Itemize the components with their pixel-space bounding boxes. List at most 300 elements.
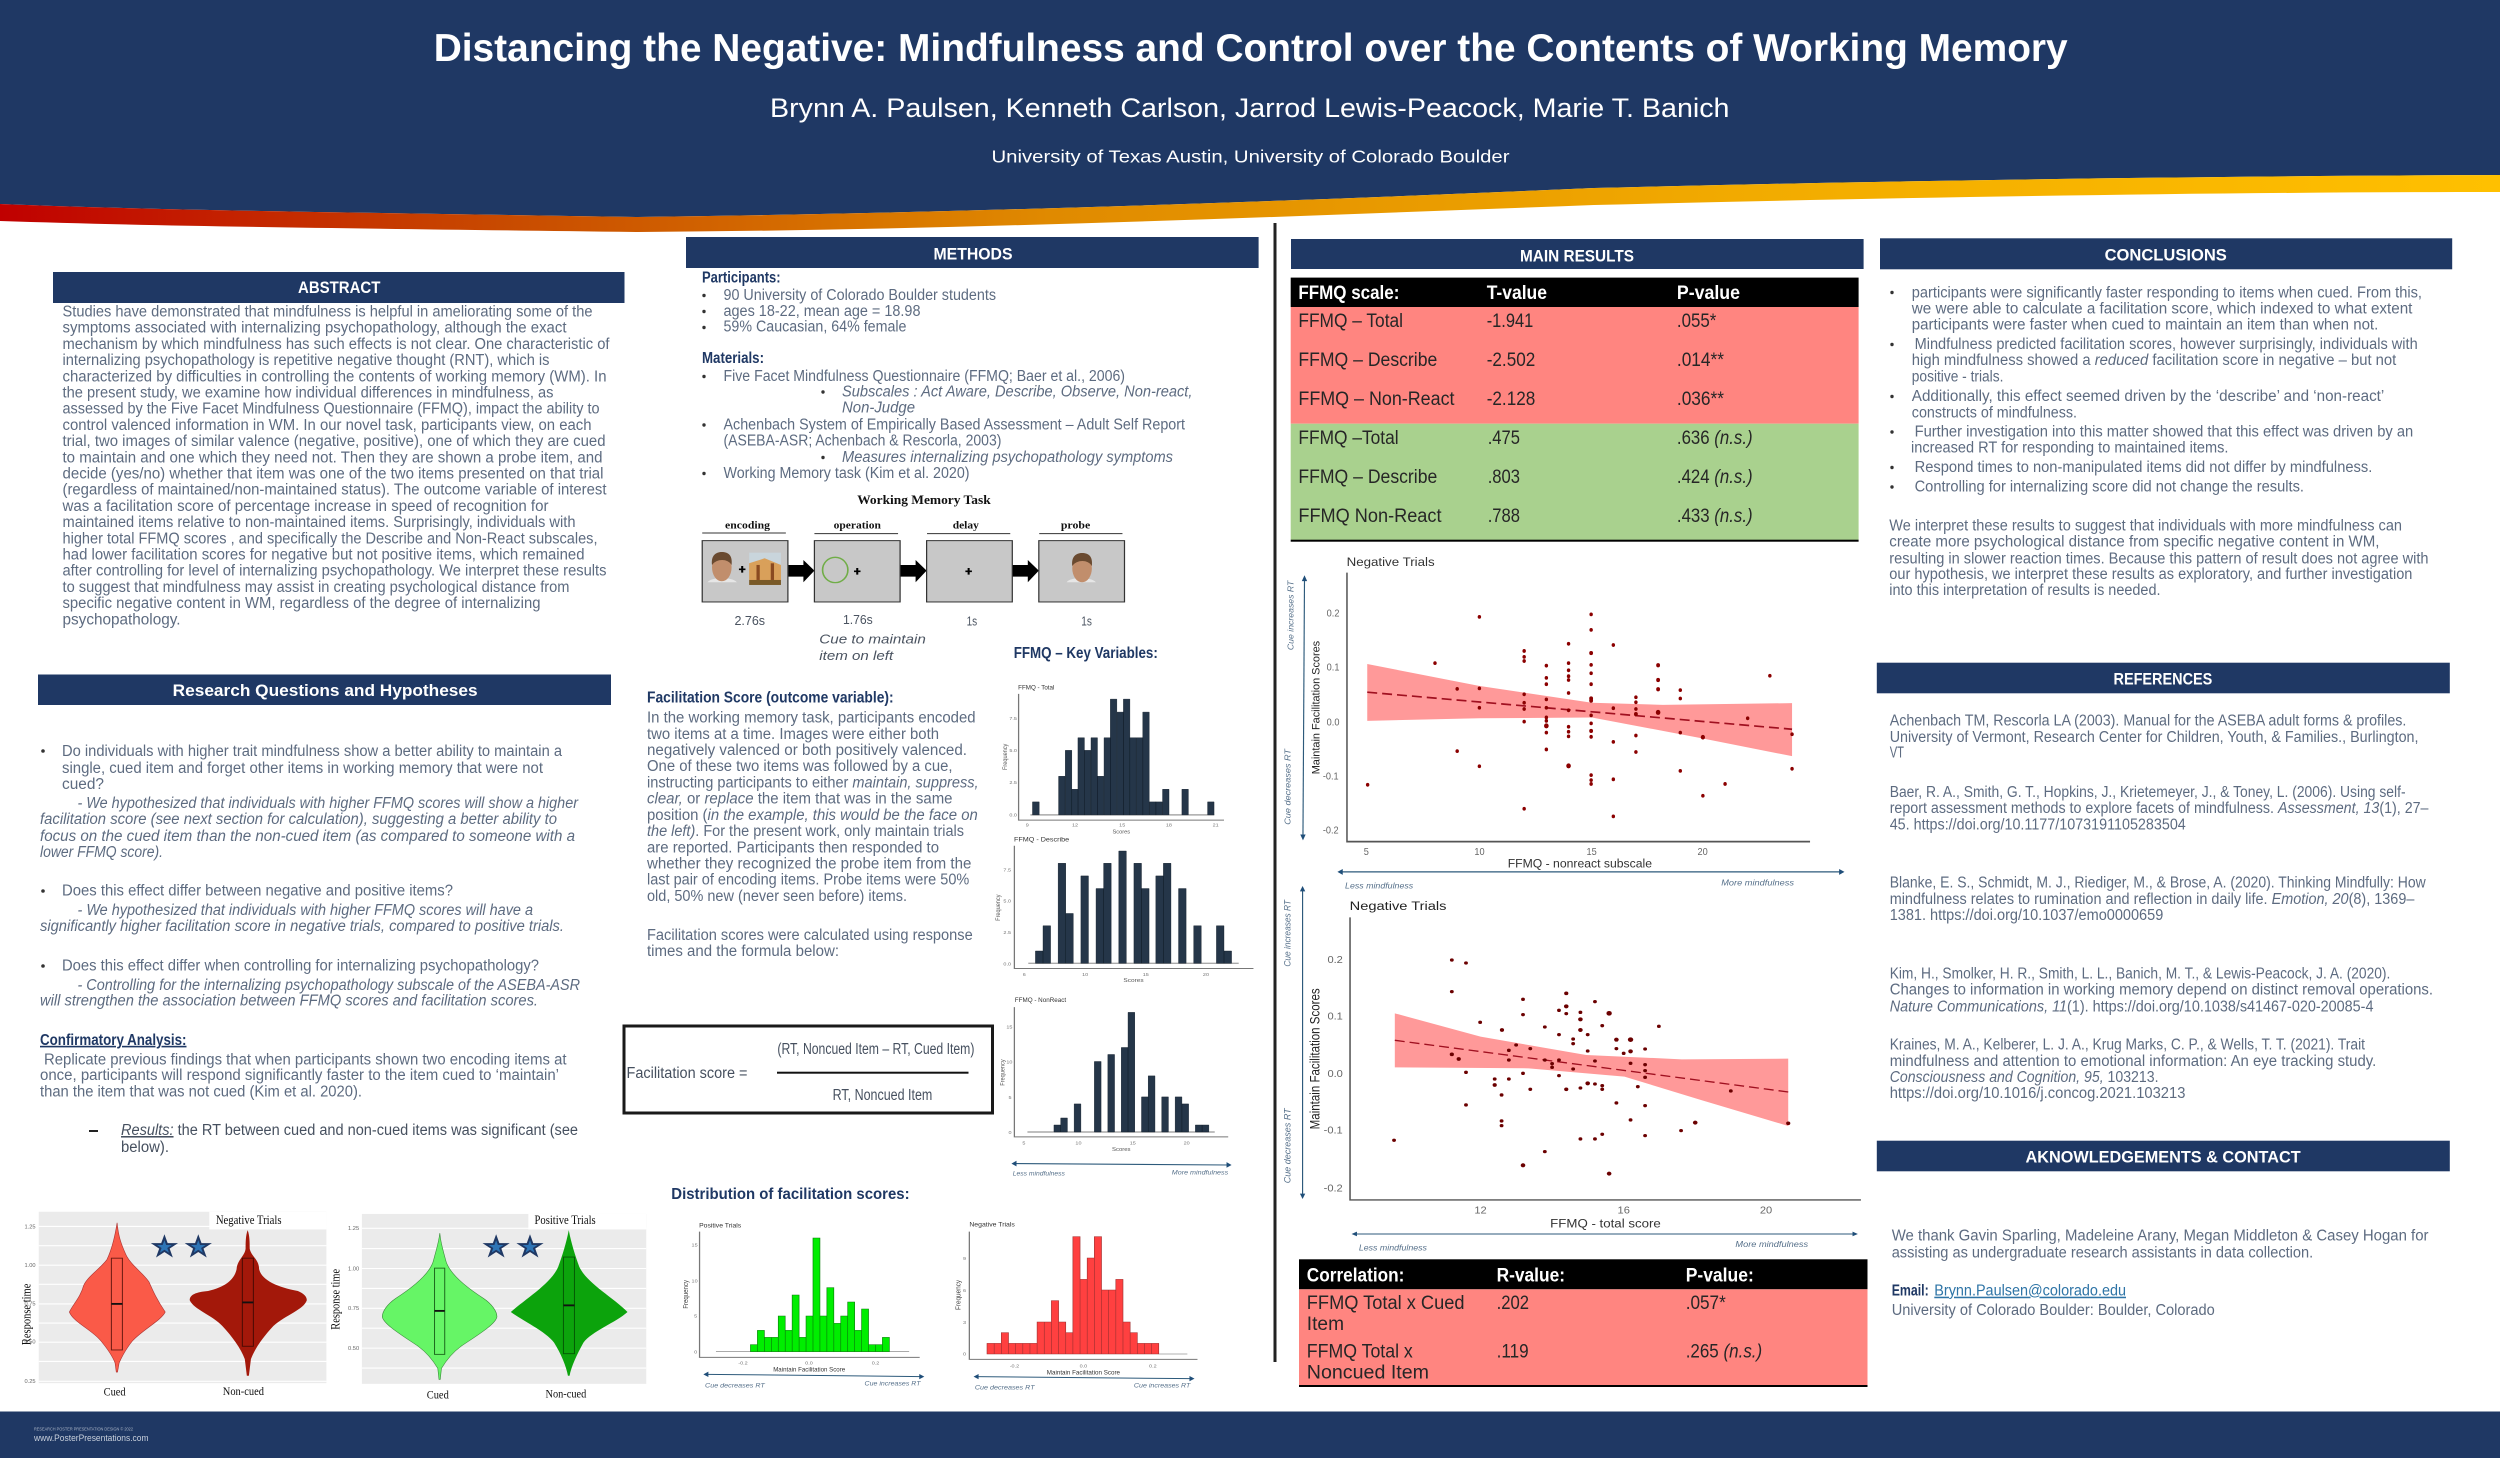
histogram: positive trials facilitation: 0.0	[805, 1361, 813, 1366]
abstract text: trial, two images of similar valence (negative, positive), one of which they are cued	[62, 433, 606, 450]
scatter plot: non-react subscale: 0.2	[1327, 608, 1339, 620]
histogram: positive trials facilitation: -0.2	[738, 1361, 748, 1366]
conclusions heading	[1880, 238, 2452, 269]
table: correlations: FFMQ Total x Cued	[1307, 1293, 1464, 1314]
histogram: positive trials facilitation	[682, 1221, 924, 1389]
facilitation score formula: RT, Noncued Item	[833, 1087, 932, 1104]
histogram: FFMQ total: 15	[1119, 823, 1125, 828]
cued violin	[382, 1233, 497, 1379]
scatter plot: non-react subscale: Cue increases RT	[1286, 580, 1295, 650]
footer url: www.PosterPresentations.com	[33, 1433, 149, 1444]
confirmatory analysis: Replicate previous findings that when participants shown two encoding items at	[44, 1051, 567, 1068]
table: FFMQ scale statistics: FFMQ – Describe	[1298, 467, 1437, 488]
timings: Cue to maintain	[819, 632, 926, 646]
timings: 1s	[1081, 614, 1092, 628]
scatter plot: total score: Maintain Facilitation Scores	[1307, 988, 1323, 1129]
timings: 1s	[967, 614, 977, 628]
violin chart: positive trials: Positive Trials	[534, 1213, 596, 1227]
abstract text: Studies have demonstrated that mindfulness is helpful in ameliorating some of the	[62, 304, 592, 320]
histogram: negative trials facilitation: 6	[963, 1288, 966, 1294]
table: correlations: FFMQ Total x	[1307, 1341, 1413, 1362]
question 3: - Controlling for the internalizing psychopathology subscale of the ASEBA-ASR	[78, 977, 580, 994]
histogram: positive trials facilitation: Frequency	[682, 1279, 690, 1309]
conclusions bullets: Controlling for internalizing score did not change the results.	[1915, 479, 2304, 496]
mindfulness labels for first scatter	[1345, 878, 1794, 890]
data points	[1392, 958, 1790, 1176]
histogram: negative trials facilitation: 0	[963, 1352, 966, 1357]
histogram: FFMQ total: 5.0	[1009, 748, 1017, 754]
violin chart: negative trials: Response time	[20, 1284, 34, 1345]
non-cued violin	[190, 1230, 307, 1376]
main results heading: MAIN RESULTS	[1520, 247, 1634, 266]
conclusions interpretation paragraph	[1889, 518, 2428, 599]
table: correlations: Correlation:	[1307, 1266, 1404, 1287]
abstract text: psychopathology.	[62, 611, 180, 628]
histogram: FFMQ total	[1003, 685, 1224, 835]
histogram: FFMQ describe: 5.0	[1003, 899, 1011, 904]
scatter plot: total score: 0.1	[1327, 1012, 1343, 1022]
scatter plot: total score: FFMQ - total score	[1550, 1217, 1661, 1230]
scatter plot: total score: 0.0	[1327, 1070, 1343, 1080]
facilitation score formula: Facilitation score =	[626, 1065, 748, 1082]
histogram: FFMQ non-react: 20	[1184, 1141, 1190, 1146]
footer credit: RESEARCH POSTER PRESENTATION DESIGN © 2022	[34, 1426, 133, 1432]
scatter plot: non-react subscale: 0.0	[1327, 717, 1339, 729]
histogram: FFMQ describe: 20	[1203, 972, 1209, 978]
histogram: negative trials facilitation: Cue decreases RT	[975, 1383, 1035, 1391]
facilitation score text: are reported. Participants then responded to	[647, 839, 939, 856]
arrow: cue effect	[703, 1372, 924, 1379]
conclusions bullets: increased RT for responding to maintained items.	[1911, 440, 2228, 457]
histogram: FFMQ total: FFMQ - Total	[1018, 685, 1055, 691]
facilitation score text	[646, 690, 979, 960]
conclusions interpretation paragraph: create more psychological distance from specific negative content in WM,	[1889, 534, 2380, 551]
violin chart: negative trials: 0.75	[24, 1302, 36, 1308]
mindfulness labels for first scatter: Less mindfulness	[1345, 881, 1414, 890]
conclusions bullets	[1890, 284, 2422, 496]
histogram: negative trials facilitation: 3	[963, 1320, 966, 1326]
table: FFMQ scale statistics: -2.502	[1487, 350, 1535, 371]
reference list: Consciousness and Cognition, 95, 103213.	[1890, 1069, 2158, 1086]
histogram: negative trials facilitation: Negative Trials	[969, 1221, 1015, 1228]
histogram: FFMQ describe: 6	[1023, 972, 1026, 978]
authors: Brynn A. Paulsen, Kenneth Carlson, Jarrod Lewis-Peacock, Marie T. Banich	[770, 93, 1730, 123]
confirmatory analysis: Confirmatory Analysis:	[40, 1032, 186, 1049]
reference list: Achenbach TM, Rescorla LA (2003). Manual for the ASEBA adult forms & profiles.	[1890, 712, 2406, 729]
facilitation score text: negatively valenced or both positively valenced.	[647, 742, 967, 759]
violin chart: negative trials: 1.00	[24, 1263, 36, 1269]
histogram: FFMQ total: Frequency	[1003, 744, 1009, 770]
face and building stimuli	[708, 552, 1096, 585]
table: FFMQ scale statistics: -2.128	[1487, 389, 1535, 410]
violin chart: positive trials: 0.50	[348, 1346, 359, 1352]
contact details: University of Colorado Boulder: Boulder, Colorado	[1892, 1302, 2215, 1319]
table: FFMQ scale statistics: FFMQ – Total	[1298, 311, 1403, 332]
violin chart: positive trials: Cued	[427, 1388, 449, 1401]
violin chart: negative trials: 0.50	[24, 1340, 36, 1346]
conclusions interpretation paragraph: into this interpretation of results is needed.	[1889, 582, 2160, 599]
table: FFMQ scale statistics: FFMQ – Non-React	[1298, 389, 1455, 410]
mindfulness labels for first scatter: More mindfulness	[1721, 878, 1794, 888]
stimulus boxes	[702, 541, 1124, 602]
facilitation score text: whether they recognized the probe item from the	[646, 856, 971, 873]
cued violin	[69, 1223, 165, 1372]
question 2: Does this effect differ between negative and positive items?	[62, 882, 453, 900]
table: correlations: .265 (n.s.)	[1686, 1341, 1762, 1362]
conclusions interpretation paragraph: our hypothesis, we interpret these results as exploratory, and further investigation	[1889, 566, 2412, 583]
histogram: negative trials facilitation: 9	[963, 1256, 966, 1262]
table: correlations: .057*	[1686, 1293, 1726, 1314]
abstract text: decide (yes/no) whether that item was one of the two items presented on that trial	[62, 466, 604, 482]
histogram: negative trials facilitation: Frequency	[955, 1279, 963, 1310]
histogram: positive trials facilitation: Positive Trials	[699, 1221, 741, 1229]
confirmatory analysis: Results: the RT between cued and non-cued items was significant (see	[121, 1122, 578, 1139]
violin chart: positive trials: Response time	[329, 1269, 343, 1330]
reference list: University of Vermont, Research Center for Children, Youth, & Families., Burlington,	[1890, 729, 2418, 746]
vertical arrow	[1300, 575, 1307, 840]
question 2: - We hypothesized that individuals with higher FFMQ scores will have a	[78, 902, 533, 919]
histogram: FFMQ total: 2.5	[1009, 780, 1017, 786]
timings: item on left	[819, 648, 894, 663]
table: FFMQ scale statistics: FFMQ scale:	[1298, 283, 1399, 304]
violin chart: positive trials	[329, 1213, 646, 1401]
violin chart: negative trials: Negative Trials	[216, 1213, 282, 1227]
panel: conclusions	[1880, 238, 2452, 599]
histogram: FFMQ non-react: 5	[1022, 1141, 1026, 1146]
panel: abstract	[53, 272, 624, 628]
histogram: FFMQ describe: 7.5	[1003, 868, 1011, 873]
materials	[702, 350, 1192, 482]
abstract text: characterized by difficulties in controlling the contents of working memory (WM). In	[62, 368, 606, 385]
panel: research questions and hypotheses	[20, 674, 646, 1401]
reference list: 1381. https://doi.org/10.1037/emo0000659	[1890, 907, 2163, 924]
histogram: negative trials facilitation: 0.2	[1149, 1364, 1157, 1369]
facilitation score text: old, 50% new (never seen before) items.	[647, 888, 907, 905]
scatter plot: non-react subscale: 15	[1587, 847, 1597, 858]
abstract text: to maintain and one which they need not. Then they are shown a probe item, and	[62, 449, 602, 466]
working memory task diagram: encoding	[725, 519, 770, 531]
table: correlations: Noncued Item	[1307, 1362, 1429, 1383]
abstract text: had lower facilitation scores for negative but not positive items, which remained	[62, 546, 584, 564]
table: FFMQ scale statistics	[1291, 278, 1859, 542]
abstract text: internalizing psychopathology is repetitive negative thought (RNT), which is	[62, 352, 550, 369]
scatter plot: total score: 20	[1760, 1206, 1772, 1216]
table: FFMQ scale statistics: .055*	[1677, 311, 1717, 332]
histogram: FFMQ non-react: 10	[1075, 1141, 1082, 1146]
footer bar	[0, 1412, 2500, 1458]
materials: Working Memory task (Kim et al. 2020)	[724, 465, 970, 482]
panel: acknowledgements and contact	[1877, 1141, 2450, 1319]
reference list: Blanke, E. S., Schmidt, M. J., Riediger, M., & Brose, A. (2020). Thinking Mindfully: How	[1890, 874, 2426, 891]
violin chart: positive trials: 1.25	[348, 1226, 359, 1232]
table: FFMQ scale statistics: .036**	[1677, 389, 1725, 410]
scatter plot: total score: 0.2	[1327, 956, 1343, 966]
histogram: negative trials facilitation: Maintain Facilitation Score	[1047, 1368, 1120, 1376]
conclusions bullets: participants were faster when cued to maintain an item than when not.	[1912, 317, 2378, 334]
scatter plot: total score: 12	[1474, 1206, 1487, 1216]
regression line	[1395, 1040, 1788, 1092]
abstract text	[62, 304, 610, 628]
facilitation score text: times and the formula below:	[647, 943, 839, 960]
question 3	[40, 957, 580, 1010]
regression line	[1367, 692, 1792, 729]
horizontal arrow	[1352, 1232, 1858, 1236]
histogram: positive trials facilitation: 10	[692, 1279, 698, 1284]
reference list: Changes to information in working memory depend on distinct removal operations.	[1890, 982, 2433, 999]
reference list: mindfulness and attention to emotional information: An eye tracking study.	[1890, 1053, 2376, 1070]
scatter plot: total score: Less mindfulness	[1359, 1243, 1427, 1252]
acknowledgements text: assisting as undergraduate research assistants in data collection.	[1892, 1244, 2313, 1261]
facilitation score text: two items at a time. Images were either both	[647, 726, 939, 743]
question 1	[40, 743, 579, 861]
non-cued violin	[511, 1230, 628, 1376]
question 3: will strengthen the association between FFMQ scores and facilitation scores.	[40, 993, 538, 1010]
conclusions bullets: constructs of mindfulness.	[1912, 404, 2077, 421]
question 1: lower FFMQ score).	[40, 844, 163, 861]
research questions heading: Research Questions and Hypotheses	[173, 681, 478, 700]
conclusions heading: CONCLUSIONS	[2105, 245, 2227, 264]
participants	[702, 270, 996, 336]
conclusions bullets: we were able to calculate a facilitation score, which indexed to what extent	[1911, 301, 2413, 318]
table: FFMQ scale statistics: .803	[1488, 467, 1520, 488]
scatter plot: non-react subscale: 10	[1474, 847, 1485, 858]
scatter plot: total score: More mindfulness	[1735, 1240, 1809, 1249]
working memory task diagram: probe	[1061, 519, 1090, 531]
question 1: - We hypothesized that individuals with higher FFMQ scores will show a higher	[78, 795, 579, 812]
research questions heading	[38, 674, 611, 705]
timings	[734, 612, 1092, 663]
column divider	[1274, 223, 1276, 1362]
histogram: FFMQ non-react: 0	[1008, 1130, 1012, 1136]
materials: Materials:	[702, 350, 764, 367]
scatter plot: non-react subscale: 0.1	[1327, 662, 1339, 674]
scatter plot: total score: Negative Trials	[1350, 899, 1446, 913]
abstract text: mechanism by which mindfulness has such effects is not clear. One characteristic of	[62, 336, 610, 353]
contact details	[1892, 1283, 2215, 1319]
abstract text: (regardless of maintained/non-maintained status). The outcome variable of interest	[62, 482, 607, 499]
conclusions bullets: Additionally, this effect seemed driven by the ‘describe’ and ‘non-react’	[1912, 388, 2384, 405]
materials: (ASEBA-ASR; Achenbach & Rescorla, 2003)	[724, 432, 1001, 449]
participants: 90 University of Colorado Boulder students	[724, 287, 996, 304]
distribution of facilitation scores heading: Distribution of facilitation scores:	[671, 1186, 910, 1203]
conclusions interpretation paragraph: resulting in slower reaction times. Because this pattern of result does not agree with	[1889, 550, 2428, 567]
table: FFMQ scale statistics: FFMQ Non-React	[1298, 506, 1442, 527]
panel: methods	[624, 237, 1259, 1391]
violin chart: negative trials	[20, 1212, 326, 1398]
histogram: FFMQ non-react: 10	[1006, 1060, 1013, 1065]
working memory task diagram: delay	[953, 519, 979, 531]
main results heading	[1291, 239, 1864, 269]
facilitation score text: instructing participants to either maintain, suppress,	[647, 774, 979, 792]
scatter plot: total score: 16	[1618, 1206, 1630, 1216]
FFMQ key variables heading: FFMQ – Key Variables:	[1014, 645, 1158, 662]
table: FFMQ scale statistics: .014**	[1677, 350, 1725, 371]
table: FFMQ scale statistics: P-value	[1677, 283, 1740, 304]
data points	[1366, 612, 1794, 818]
acknowledgements text: We thank Gavin Sparling, Madeleine Arany, Megan Middleton & Casey Hogan for	[1892, 1228, 2428, 1245]
working memory task diagram: operation	[834, 519, 881, 531]
abstract text: control valenced information in WM. In our novel task, participants view, on each	[62, 417, 592, 434]
contact details: Brynn.Paulsen@colorado.edu	[1934, 1283, 2126, 1300]
histogram: FFMQ non-react: FFMQ - NonReact	[1015, 998, 1066, 1004]
panel: references	[1877, 663, 2450, 1102]
abstract text: higher total FFMQ scores , and specifically the Describe and Non-React subscales,	[62, 530, 598, 547]
facilitation score formula	[624, 1026, 992, 1113]
scatter plot: total score: Cue increases RT	[1282, 899, 1292, 967]
arrow shafts and heads	[788, 560, 1039, 582]
histogram: negative trials facilitation: 0.0	[1080, 1364, 1087, 1369]
abstract text: to suggest that mindfulness may assist in creating psychological distance from	[62, 579, 570, 596]
question 1: single, cued item and forget other items in working memory that were not	[62, 760, 544, 777]
conclusions bullets: Further investigation into this matter showed that this effect was driven by an	[1915, 424, 2413, 441]
materials: Subscales : Act Aware, Describe, Observe, Non-react,	[842, 384, 1192, 401]
histogram: FFMQ describe: FFMQ - Describe	[1014, 837, 1069, 843]
abstract heading: ABSTRACT	[298, 278, 381, 297]
scatter plot: non-react subscale: Maintain Facilitation Scores	[1309, 641, 1322, 774]
scatter plot: non-react subscale: FFMQ - nonreact subscale	[1508, 857, 1652, 871]
histogram: FFMQ describe	[996, 837, 1253, 984]
vertical arrow	[1300, 886, 1305, 1199]
scatter plot: non-react subscale: Negative Trials	[1347, 555, 1435, 569]
histogram: positive trials facilitation: 5	[694, 1314, 697, 1319]
references heading	[1877, 663, 2450, 693]
colour swoosh	[0, 175, 2500, 232]
violin chart: positive trials: Non-cued	[545, 1387, 586, 1400]
table: FFMQ scale statistics: FFMQ –Total	[1298, 428, 1399, 449]
methods heading	[686, 237, 1259, 268]
abstract text: specific negative content in WM, regardless of the degree of internalizing	[62, 595, 540, 612]
histogram: FFMQ total: 21	[1213, 823, 1219, 828]
timings: 2.76s	[734, 613, 765, 628]
facilitation score text: Facilitation Score (outcome variable):	[647, 690, 894, 707]
scatter plot: total score: -0.1	[1324, 1126, 1343, 1136]
histogram: positive trials facilitation: Cue decreases RT	[705, 1381, 765, 1389]
working memory task diagram: Working Memory Task	[857, 493, 991, 508]
table: correlations	[1299, 1259, 1868, 1387]
table: correlations: R-value:	[1497, 1266, 1565, 1287]
reference list: 45. https://doi.org/10.1177/1073191105283504	[1890, 817, 2186, 834]
participants: ages 18-22, mean age = 18.98	[724, 303, 920, 320]
scatter plot: total score	[1282, 886, 1861, 1252]
table: FFMQ scale statistics: .433 (n.s.)	[1677, 506, 1753, 527]
confirmatory analysis	[40, 1032, 578, 1156]
confirmatory analysis: below).	[121, 1139, 169, 1156]
reference list: Baer, R. A., Smith, G. T., Hopkins, J., Krietemeyer, J., & Toney, L. (2006). Using self-	[1890, 784, 2406, 801]
table: FFMQ scale statistics: .424 (n.s.)	[1677, 467, 1753, 488]
reference list: VT	[1890, 745, 1904, 762]
abstract heading	[53, 272, 624, 303]
question 2: significantly higher facilitation score in negative trials, compared to positive trials.	[40, 918, 564, 935]
materials: Non-Judge	[842, 400, 915, 417]
abstract text: after controlling for level of internalizing psychopathology. We interpret these results	[62, 563, 607, 580]
question 1: Do individuals with higher trait mindfulness show a better ability to maintain a	[62, 743, 562, 760]
abstract text: symptoms associated with internalizing psychopathology, although the exact	[62, 320, 567, 337]
table: correlations: .202	[1497, 1293, 1529, 1314]
histogram: FFMQ total: 18	[1166, 823, 1172, 828]
histogram: FFMQ total: 9	[1026, 823, 1029, 828]
arrow: less to more mindfulness	[1011, 1161, 1232, 1168]
histogram: FFMQ describe: 10	[1082, 972, 1088, 978]
question 1: cued?	[62, 776, 104, 793]
confirmatory analysis: than the item that was not cued (Kim et al. 2020).	[40, 1084, 362, 1101]
abstract text: the present study, we examine how individual differences in mindfulness, as	[62, 384, 554, 402]
header banner	[0, 0, 2500, 232]
histogram: FFMQ non-react	[1000, 998, 1232, 1177]
participants: 59% Caucasian, 64% female	[724, 319, 906, 336]
facilitation score text: clear, or replace the item that was in the same	[647, 791, 952, 808]
facilitation score text: the left). For the present work, only maintain trials	[647, 823, 964, 840]
acknowledgements heading: AKNOWLEDGEMENTS & CONTACT	[2026, 1148, 2301, 1167]
question 1: focus on the cued item than the non-cued item (as compared to someone with a	[40, 828, 575, 845]
panel: main results	[1282, 239, 1868, 1387]
table: FFMQ scale statistics: .475	[1488, 428, 1520, 449]
scatter plot: non-react subscale: Cue decreases RT	[1283, 748, 1292, 825]
significance stars	[154, 1237, 209, 1255]
reference list: mindfulness relates to rumination and reflection in daily life. Emotion, 20(8), 1369–	[1890, 891, 2415, 908]
histogram: negative trials facilitation: -0.2	[1010, 1364, 1019, 1369]
table: FFMQ scale statistics: -1.941	[1487, 311, 1533, 332]
histogram: positive trials facilitation: 0.2	[872, 1361, 880, 1366]
facilitation score text: In the working memory task, participants encoded	[647, 710, 976, 727]
histogram: positive trials facilitation: 0	[694, 1350, 697, 1355]
conclusions bullets: Respond times to non-manipulated items did not differ by mindfulness.	[1915, 459, 2372, 476]
table: FFMQ scale statistics: .636 (n.s.)	[1677, 428, 1753, 449]
histogram: negative trials facilitation	[955, 1221, 1197, 1391]
facilitation score formula: (RT, Noncued Item – RT, Cued Item)	[777, 1041, 974, 1058]
histogram: FFMQ non-react: More mindfulness	[1172, 1168, 1228, 1176]
conclusions bullets: participants were significantly faster responding to items when cued. From this,	[1912, 284, 2422, 301]
reference list: Kraines, M. A., Kelberer, L. J. A., Krug Marks, C. P., & Wells, T. T. (2021). Trait	[1890, 1036, 2366, 1053]
violin chart: negative trials: 1.25	[24, 1225, 36, 1230]
facilitation score text: position (in the example, this would be the face on	[647, 807, 978, 824]
conclusions interpretation paragraph: We interpret these results to suggest that individuals with more mindfulness can	[1889, 518, 2402, 535]
table: FFMQ scale statistics: .788	[1488, 506, 1520, 527]
table: FFMQ scale statistics: T-value	[1487, 283, 1547, 304]
timings: 1.76s	[843, 612, 873, 627]
acknowledgements text	[1892, 1228, 2428, 1261]
histogram: FFMQ non-react: Frequency	[1000, 1059, 1006, 1086]
histogram: FFMQ describe: 0.0	[1003, 962, 1011, 967]
violin chart: negative trials: Cued	[104, 1385, 126, 1398]
violin chart: negative trials: Non-cued	[223, 1385, 264, 1398]
histogram: positive trials facilitation: 15	[692, 1243, 698, 1248]
significance stars	[486, 1237, 540, 1255]
histogram: FFMQ non-react: Scores	[1112, 1147, 1131, 1153]
reference list: report assessment methods to explore facets of mindfulness. Assessment, 13(1), 27–	[1890, 800, 2429, 817]
table: correlations: Item	[1307, 1314, 1344, 1335]
histogram: FFMQ non-react: Less mindfulness	[1013, 1169, 1065, 1177]
confidence band	[1395, 1013, 1788, 1126]
histogram: FFMQ non-react: 15	[1006, 1025, 1013, 1030]
abstract text: assessed by the Five Facet Mindfulness Questionnaire (FFMQ), impact the ability to	[62, 401, 600, 418]
scatter plot: non-react subscale: 20	[1698, 847, 1708, 858]
violin chart: positive trials: 0.75	[348, 1306, 359, 1312]
affiliations: University of Texas Austin, University of Colorado Boulder	[992, 147, 1510, 167]
histogram: FFMQ total: 12	[1072, 823, 1078, 828]
arrow: cue effect	[974, 1374, 1195, 1381]
table: correlations: P-value:	[1686, 1266, 1754, 1287]
histogram: positive trials facilitation: Cue increases RT	[865, 1379, 921, 1387]
methods heading: METHODS	[934, 244, 1012, 263]
materials: Five Facet Mindfulness Questionnaire (FFMQ; Baer et al., 2006)	[724, 368, 1125, 385]
scatter plot: non-react subscale: -0.2	[1323, 825, 1339, 837]
violin chart: positive trials: 1.00	[348, 1267, 359, 1272]
table: correlations: .119	[1497, 1341, 1529, 1362]
conclusions bullets: positive - trials.	[1912, 369, 2003, 386]
conclusions bullets: high mindfulness showed a reduced facilitation score in negative – but not	[1912, 352, 2397, 369]
materials: Measures internalizing psychopathology symptoms	[842, 449, 1173, 466]
question 3: Does this effect differ when controlling for internalizing psychopathology?	[62, 957, 539, 974]
